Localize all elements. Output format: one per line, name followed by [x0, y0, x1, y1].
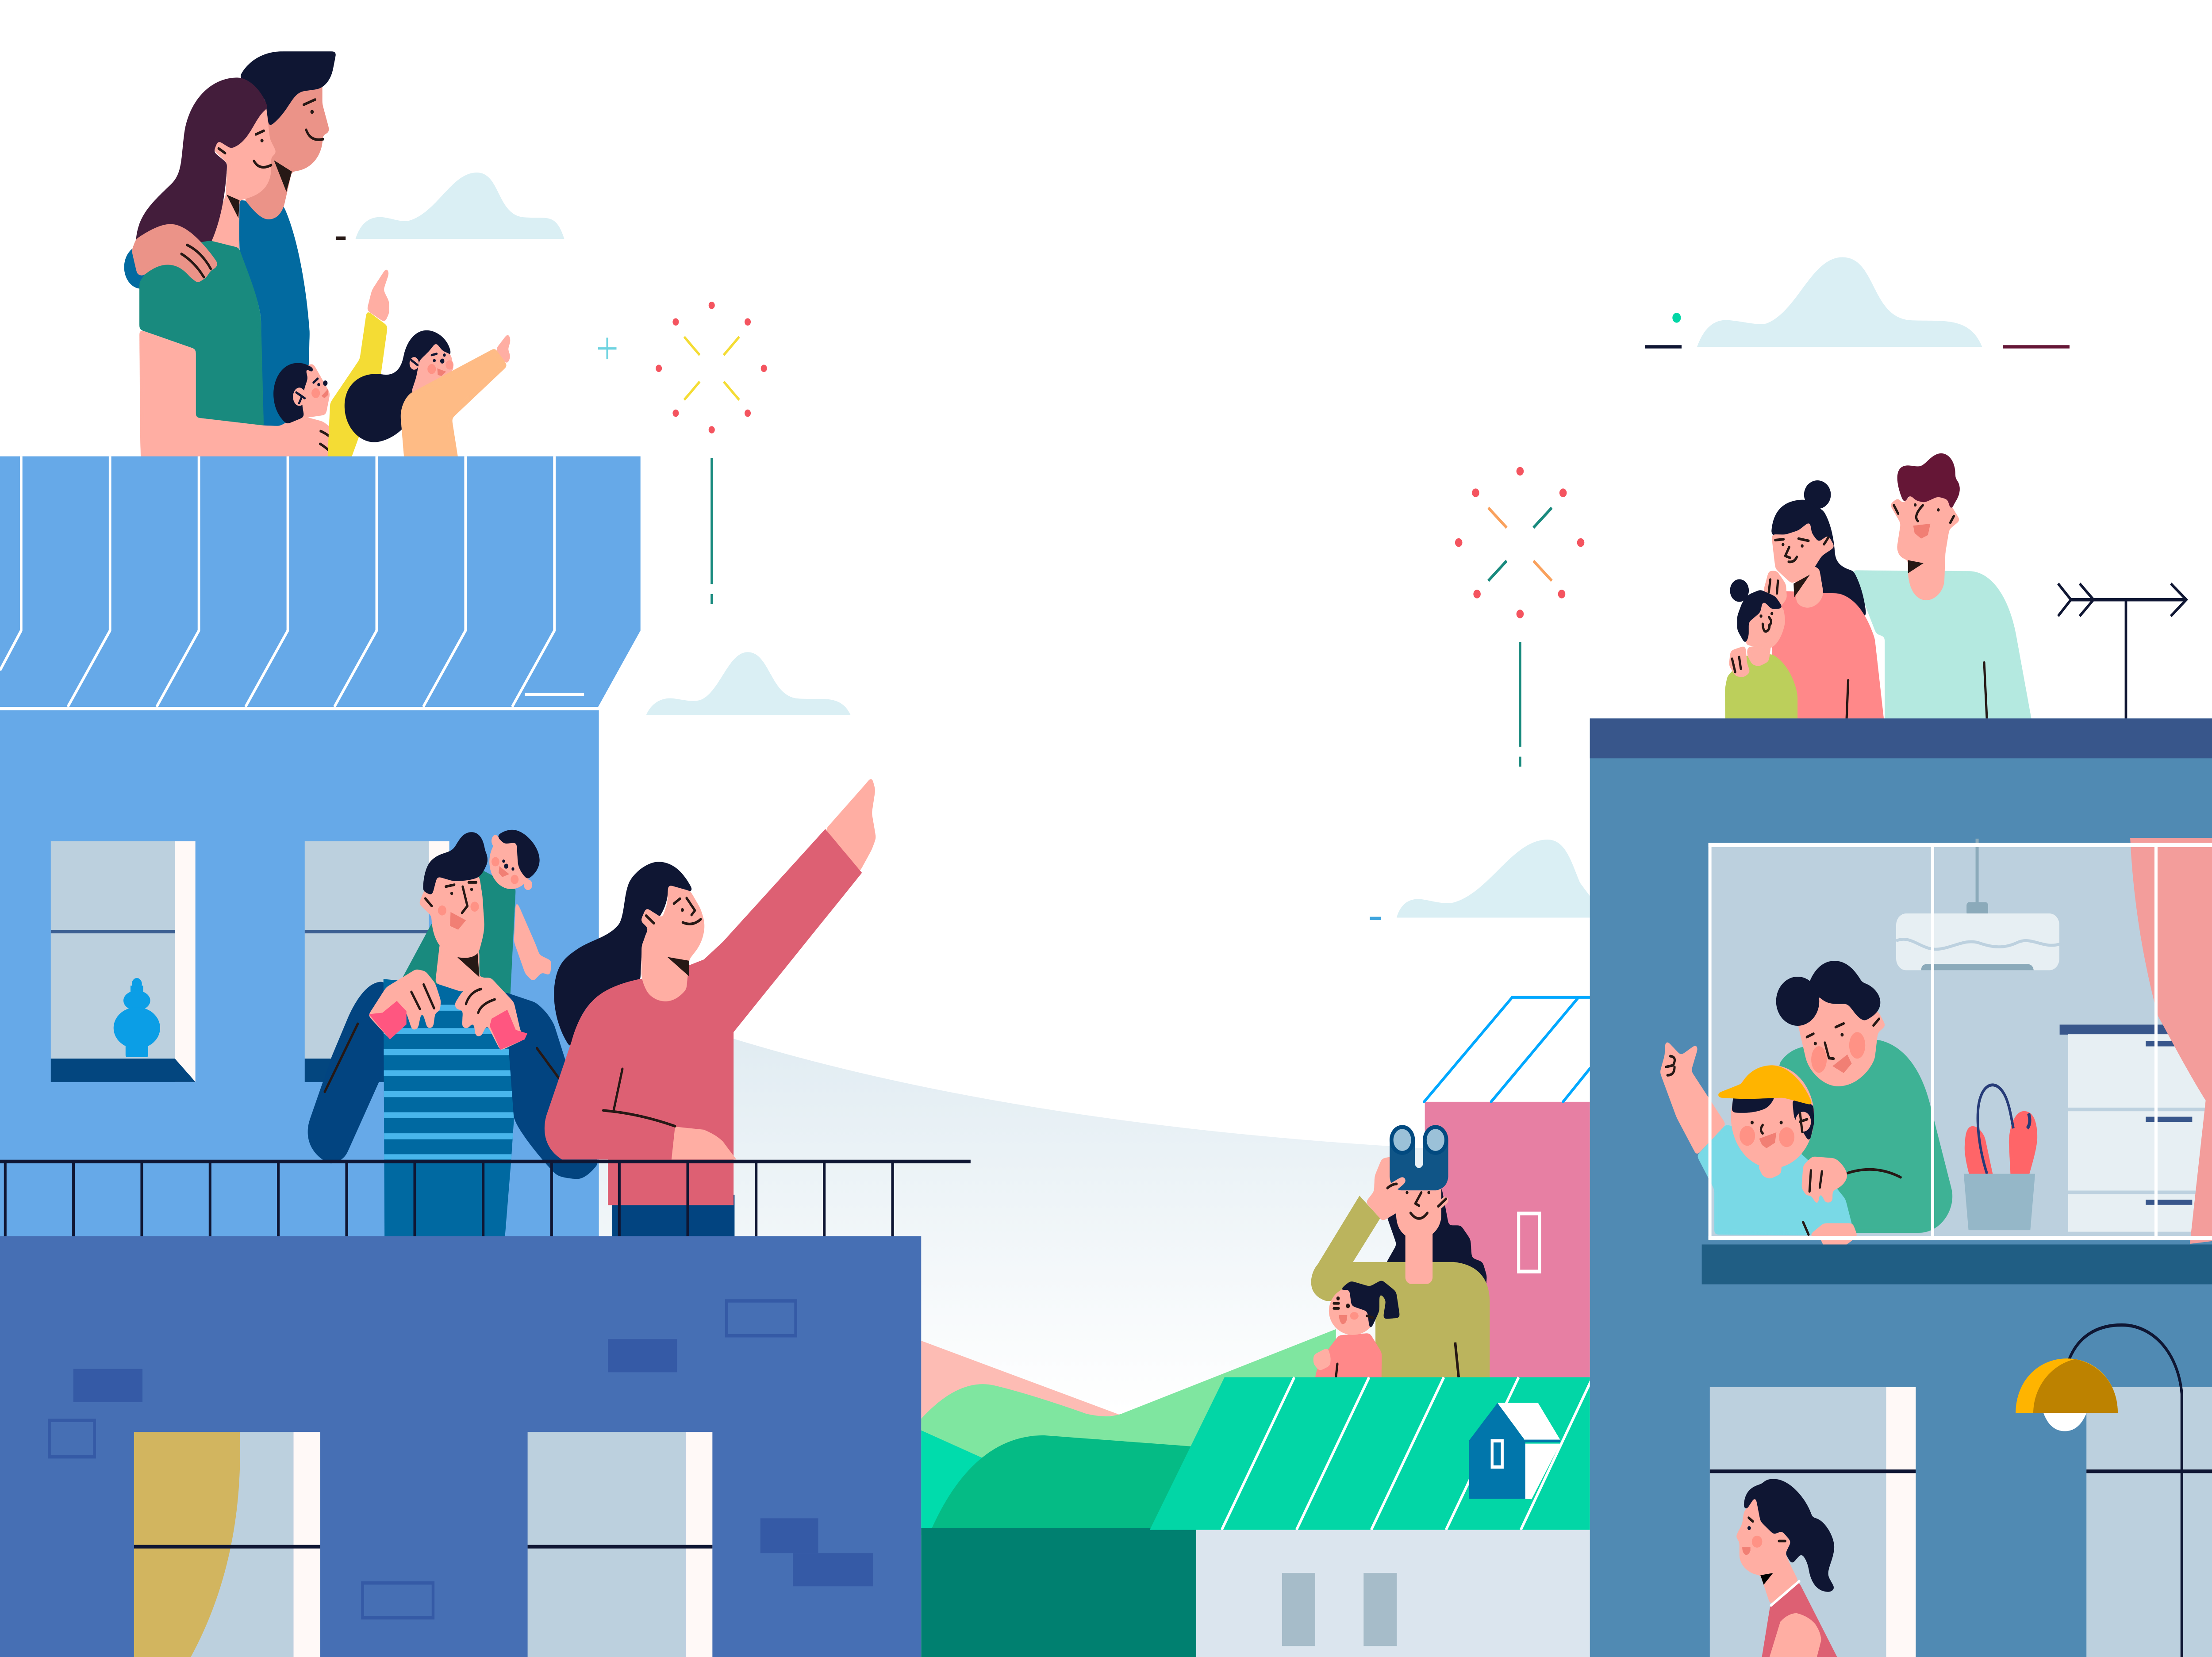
window with yellow curtain: [134, 1432, 320, 1657]
mother: [136, 77, 336, 468]
father with child on shoulders: [307, 830, 598, 1244]
left building roof: [0, 456, 641, 707]
father head: [435, 943, 491, 992]
man's hand on mother's shoulder: [132, 224, 218, 283]
window ledge: [1702, 1244, 2212, 1284]
woman pointing up: [545, 777, 876, 1244]
boy with yellow cap: [1660, 1041, 1858, 1248]
girl pointing: [345, 330, 511, 468]
woman with binoculars: [1311, 1125, 1490, 1385]
boy in yellow: [273, 267, 389, 464]
right building: [1590, 718, 2212, 1657]
curtain: [2130, 838, 2212, 1244]
second window: [305, 841, 449, 1082]
right roof family: [1725, 453, 2033, 727]
jacket left: [307, 982, 395, 1164]
top left family: [124, 51, 511, 468]
distant sky haze: [598, 996, 1425, 1411]
man's hand on boy's shoulder: [1801, 1156, 1847, 1206]
father's hands with red cards: [325, 969, 559, 1092]
lower right window: [2086, 1387, 2212, 1657]
potted plant: [1964, 1085, 2037, 1230]
window frame: [1709, 843, 2212, 1240]
large window interior: [1710, 838, 2212, 1244]
little girl with ponytail: [1313, 1280, 1400, 1385]
drawer cabinet: [2060, 1024, 2212, 1232]
cloud: middle: [646, 652, 851, 715]
pink house: [1424, 997, 1590, 1379]
girl: [1725, 579, 1797, 727]
air conditioner: [1896, 839, 2060, 970]
tv antenna: [2058, 583, 2186, 720]
man in green behind boy: [1776, 961, 1952, 1233]
icon: blue vase: [114, 978, 160, 1057]
lower left building: [0, 1236, 921, 1657]
man: [124, 51, 337, 435]
sparkle marks in the sky: [336, 237, 2070, 920]
firework right: [1455, 467, 1584, 767]
jacket right: [493, 992, 598, 1179]
hills: [921, 1329, 1336, 1657]
binoculars: [1390, 1125, 1448, 1190]
striped shirt and trousers: [383, 979, 514, 1236]
window with vase: [51, 841, 196, 1082]
balcony railing: [0, 1162, 971, 1236]
woman with ponytail: [1736, 1479, 1842, 1657]
lower window with woman: [1710, 1387, 1916, 1657]
floor lamp: [2016, 1325, 2182, 1657]
cloud: top left: [356, 173, 565, 239]
cloud: right middle: [1397, 840, 1590, 917]
man in mint shirt: [1851, 453, 2033, 727]
cloud: top right: [1697, 257, 1982, 347]
left building wall: [0, 710, 599, 1241]
tiny blue house: [1469, 1403, 1560, 1499]
firework left: [656, 302, 767, 604]
child green body: [396, 830, 552, 1002]
window right: [528, 1432, 712, 1657]
mother: [1763, 480, 1885, 727]
green roof and white house below: [1150, 1377, 1593, 1657]
